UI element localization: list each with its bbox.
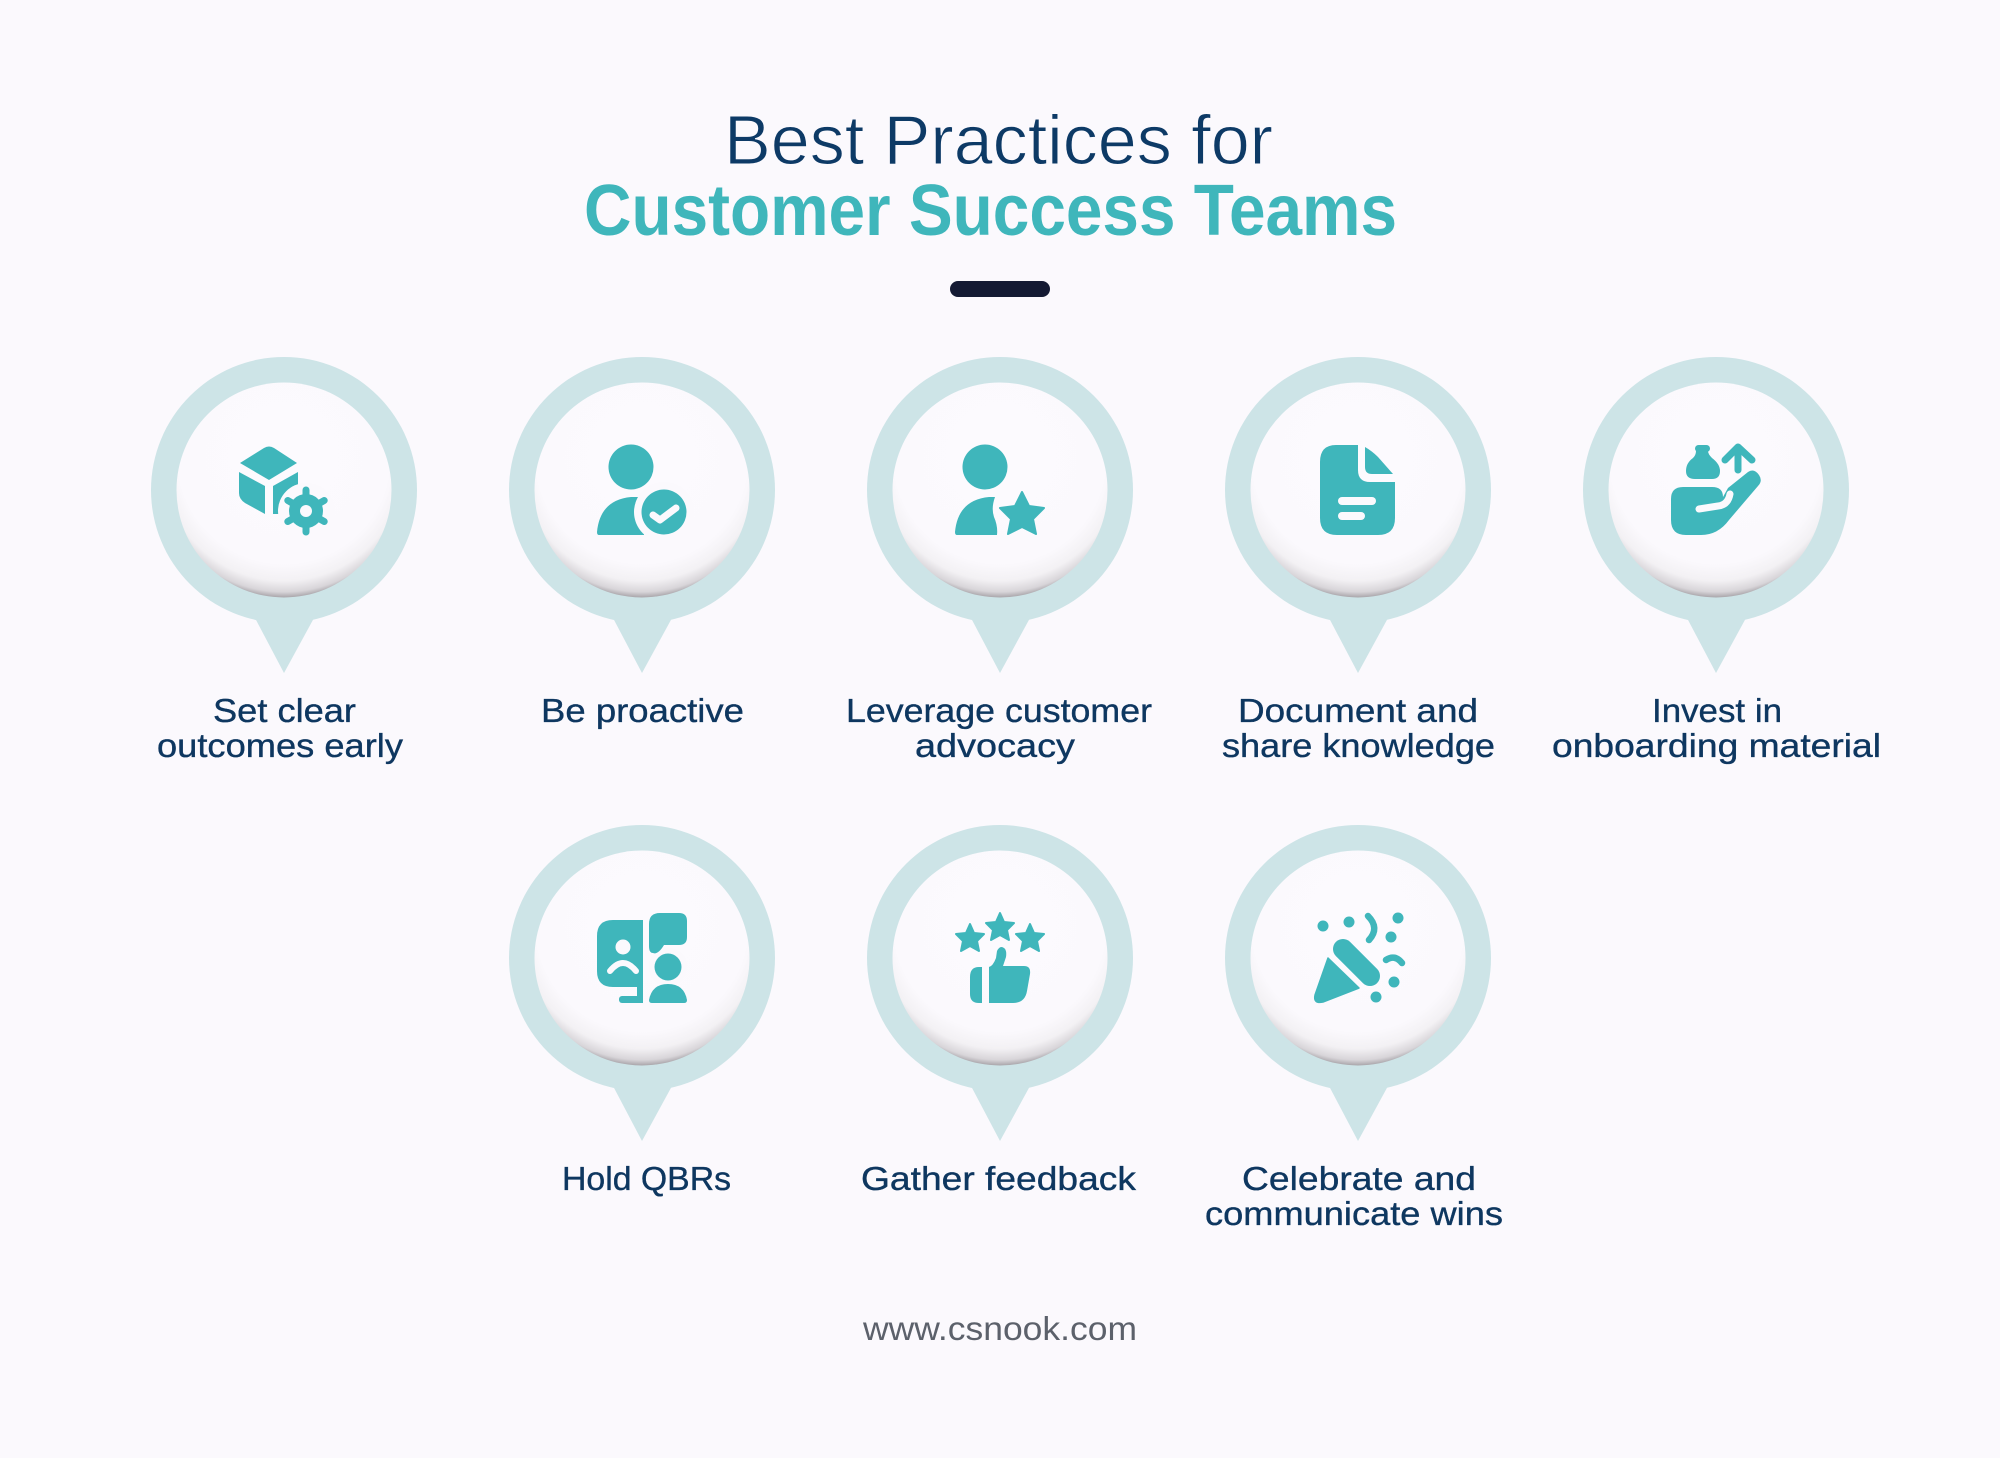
pin 5: invest in onboarding material [1583, 357, 1849, 673]
pin 8: celebrate and communicate wins [1225, 825, 1491, 1141]
icon: person with check [597, 444, 694, 542]
title accent bar [950, 281, 1050, 297]
label: invest in onboarding material [1552, 692, 1881, 764]
title: Customer Success Teams [584, 171, 1397, 251]
label: leverage customer advocacy [846, 692, 1152, 764]
pin 2: be proactive [509, 357, 775, 673]
icon: video meeting [597, 913, 687, 1003]
label: invest in onboarding material: onboarding material [1552, 727, 1881, 764]
title [584, 101, 1397, 251]
icon: hand with money bag [1671, 445, 1761, 535]
website footer: www.csnook.com [862, 1310, 1137, 1347]
label: leverage customer advocacy: Leverage customer [846, 692, 1152, 729]
label: set clear outcomes early: outcomes early [157, 727, 404, 764]
icon: party popper [1315, 912, 1404, 1002]
label: leverage customer advocacy: advocacy [915, 727, 1076, 764]
pin 6: hold QBRs [509, 825, 775, 1141]
pin 1: set clear outcomes early [151, 357, 417, 673]
label: document and share knowledge: share knowledge [1222, 727, 1495, 764]
label: be proactive: Be proactive [541, 692, 744, 729]
icon: cube and gear [239, 446, 334, 539]
label: celebrate and communicate wins [1205, 1160, 1503, 1232]
icon: person with star [955, 444, 1044, 535]
title: Best Practices for [724, 101, 1273, 179]
label: hold QBRs: Hold QBRs [562, 1160, 731, 1197]
label: document and share knowledge: Document and [1238, 692, 1478, 729]
label: set clear outcomes early [157, 692, 404, 764]
label: invest in onboarding material: Invest in [1652, 692, 1782, 729]
pin 4: document and share knowledge [1225, 357, 1491, 673]
icon: document [1320, 445, 1395, 535]
label: gather feedback: Gather feedback [861, 1160, 1137, 1197]
label: celebrate and communicate wins: Celebrate and [1242, 1160, 1476, 1197]
pin 3: leverage customer advocacy [867, 357, 1133, 673]
pin 7: gather feedback [867, 825, 1133, 1141]
label: document and share knowledge [1222, 692, 1495, 764]
icon: thumbs up and stars [956, 913, 1044, 1003]
label: set clear outcomes early: Set clear [213, 692, 356, 729]
label: celebrate and communicate wins: communicate wins [1205, 1195, 1503, 1232]
